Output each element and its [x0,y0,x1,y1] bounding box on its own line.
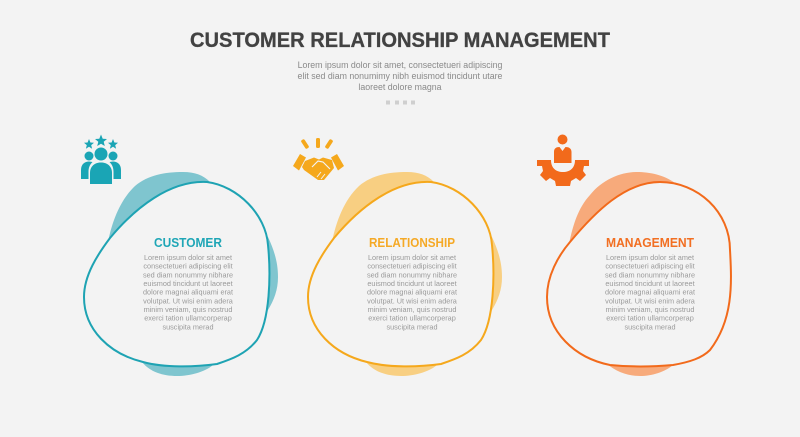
body text: customer: minim veniam, quis nostrud [144,305,232,314]
heading: customer: CUSTOMER [154,236,222,250]
subtitle text: laoreet dolore magna [358,82,442,92]
icon: customers with stars [81,134,121,184]
body text: management: suscipita merad [624,322,676,331]
blob outline: relationship [308,182,493,366]
heading: relationship: RELATIONSHIP [369,236,455,250]
body text: customer: sed diam nonummy nibhare [143,270,233,279]
blob fill: relationship [332,172,502,376]
body text: relationship [367,253,458,331]
body text: customer: suscipita merad [162,322,214,331]
body text: customer: exerci tation ullamcorperap [144,314,232,323]
title: CUSTOMER RELATIONSHIP MANAGEMENT [190,28,610,52]
body text: relationship: minim veniam, quis nostrud [368,305,456,314]
body text: management: dolore magnai aliquami erat [605,288,695,297]
body text: relationship: volutpat. Ut wisi enim adera [367,296,458,305]
body text: relationship: dolore magnai aliquami erat [367,288,457,297]
panel: relationship [293,138,502,376]
subtitle text [298,60,503,92]
body text: customer: consectetueri adipiscing elit [143,262,233,271]
heading: management: MANAGEMENT [606,236,694,250]
icon: handshake [293,138,344,180]
blob fill: management [569,172,690,376]
pagination dots [386,100,415,104]
body text: relationship: Lorem ipsum dolor sit amet [368,253,456,262]
body text: relationship: exerci tation ullamcorperap [368,314,456,323]
icon: manager and gear [537,134,589,186]
body text: management: sed diam nonummy nibhare [605,270,695,279]
body text: relationship: suscipita merad [386,322,438,331]
blob outline: customer [84,182,269,366]
body text: management [605,253,696,331]
panel: management [537,134,731,376]
body text: relationship: sed diam nonummy nibhare [367,270,457,279]
body text: customer [143,253,234,331]
blob outline: management [547,182,731,366]
body text: relationship: consectetueri adipiscing elit [367,262,457,271]
body text: relationship: euismod tincidunt ut laoreet [367,279,457,288]
body text: management: consectetueri adipiscing elit [605,262,695,271]
subtitle text: Lorem ipsum dolor sit amet, consectetueri adipiscing [298,60,503,70]
body text: management: volutpat. Ut wisi enim adera [605,296,696,305]
body text: management: euismod tincidunt ut laoreet [605,279,695,288]
body text: customer: euismod tincidunt ut laoreet [143,279,233,288]
body text: customer: volutpat. Ut wisi enim adera [143,296,234,305]
panel: customer [81,134,278,376]
body text: customer: dolore magnai aliquami erat [143,288,233,297]
body text: management: minim veniam, quis nostrud [606,305,694,314]
body text: management: exerci tation ullamcorperap [606,314,694,323]
body text: customer: Lorem ipsum dolor sit amet [144,253,232,262]
body text: management: Lorem ipsum dolor sit amet [606,253,694,262]
subtitle text: elit sed diam nonumimy nibh euismod tincidunt utare [298,71,503,81]
blob fill: customer [108,172,278,376]
